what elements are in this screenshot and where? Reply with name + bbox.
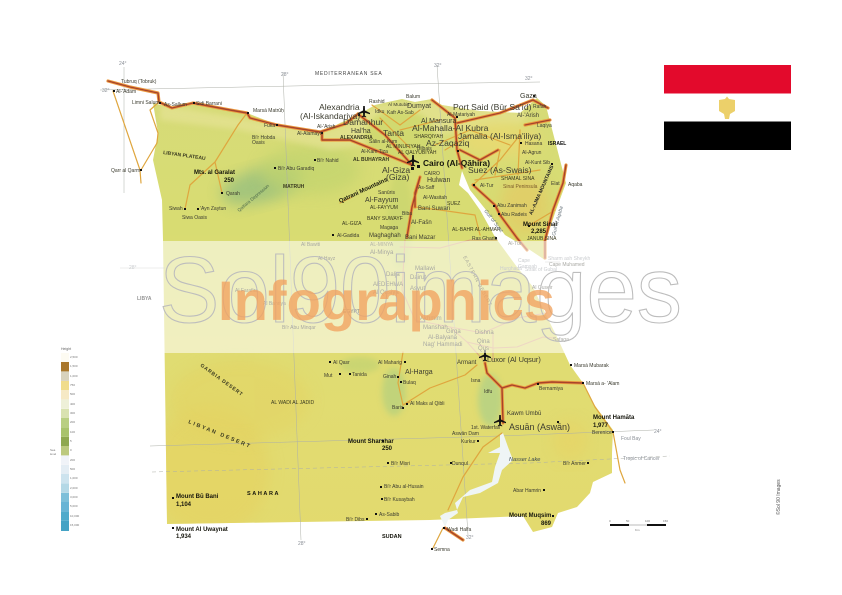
labels: Nile valley and eastern coast: Qus bbox=[478, 346, 489, 352]
labels: Nile valley and eastern coast: Dishna bbox=[475, 330, 494, 336]
labels: Nile delta: AL QALYUBIYAH bbox=[398, 150, 437, 156]
legend: height colour scale: 750 bbox=[70, 383, 75, 387]
labels: Sinai: Cape bbox=[518, 258, 530, 264]
flag emblem: eagle bbox=[719, 96, 735, 119]
labels: Sinai: 2,285 bbox=[531, 229, 547, 235]
labels: sea and countries: LIBYA bbox=[137, 296, 152, 302]
labels: Nile delta: Az-Zaqaziq bbox=[426, 138, 470, 148]
labels: Sinai: Sharm ash Sheykh bbox=[548, 256, 590, 262]
labels: Aswan and Lake Nasser: Mount Muqsim bbox=[509, 513, 551, 519]
labels: western desert and south: Bi'r Misri bbox=[391, 461, 410, 467]
labels: Cairo to Minya: Al-Gadida bbox=[337, 233, 359, 239]
labels: north-west: (Al-Iskandariya) bbox=[300, 111, 360, 121]
labels: north-west: Siwah bbox=[169, 206, 183, 212]
labels: Sinai: SHAMAL SINA bbox=[501, 176, 535, 182]
labels: Nile delta: Dumyat bbox=[407, 103, 431, 110]
labels: sea and countries: MEDITERRANEAN SEA bbox=[315, 71, 382, 77]
legend: height colour scale: 2,500 bbox=[70, 355, 78, 359]
legend: height colour scale: level bbox=[50, 452, 57, 456]
labels: Sinai: Gamsah bbox=[518, 264, 537, 270]
scale bar bbox=[609, 519, 668, 532]
labels: Cairo to Minya: BANY SUWAYF bbox=[367, 216, 403, 222]
labels: north-west: Limni Salum bbox=[132, 100, 160, 106]
legend: height colour scale: 200 bbox=[70, 458, 75, 462]
labels: north-west: 'Ayn Zaytun bbox=[200, 206, 226, 212]
labels: Nile valley and eastern coast: Akhmim bbox=[420, 316, 442, 322]
legend: height colour scale: Height bbox=[61, 347, 71, 351]
labels: Cairo to Minya: AL-BAHR AL-AHMAR bbox=[452, 227, 501, 233]
labels: Cairo to Minya: Qatrani Mountains bbox=[338, 177, 389, 205]
labels: Nile delta: Cairo (Al-Qāhira) bbox=[423, 158, 490, 168]
labels: north-west: Al-Alamayn bbox=[297, 131, 323, 137]
labels: Aswan and Lake Nasser: Nasser Lake bbox=[509, 457, 540, 463]
labels: western desert and south: Al-Harga bbox=[405, 369, 433, 376]
labels: Nile valley and eastern coast: AL-MINYA bbox=[370, 242, 394, 248]
labels: western desert and south: Bi'r Kusaybah bbox=[384, 497, 415, 503]
labels: Sinai bbox=[480, 93, 590, 273]
labels: north-west: Bi'r Hobda bbox=[252, 135, 275, 141]
labels: Sinai: Gulf of Aqaba bbox=[551, 205, 565, 237]
labels: Cairo to Minya: Al-Fayyum bbox=[365, 197, 399, 204]
labels: north-west: Bi'r Nahid bbox=[317, 158, 339, 164]
labels: north-west: Sidi Barrani bbox=[196, 101, 222, 107]
labels: western desert and south: Tanida bbox=[352, 372, 367, 378]
labels: western desert and south: 1,934 bbox=[176, 534, 192, 540]
labels: Nile delta: Al-Mahalla-Al Kubra bbox=[412, 123, 489, 133]
labels: north-west: Tubruq (Tobruk) bbox=[121, 79, 157, 85]
labels: Nile valley and eastern coast: Al Qusiya bbox=[373, 290, 399, 296]
labels: Nile valley and eastern coast: Girga bbox=[446, 329, 461, 335]
legend: height colour scale: 300 bbox=[70, 411, 75, 415]
labels: western desert and south: As-Sabib bbox=[379, 512, 400, 518]
labels: Nile delta bbox=[340, 94, 541, 168]
labels: north-west: Qarr al Qarm bbox=[111, 168, 140, 174]
labels: Aswan and Lake Nasser: Aswān Dam bbox=[452, 431, 479, 437]
labels: Nile delta: AL MINUFIYAH bbox=[386, 144, 421, 150]
labels: Nile valley and eastern coast: Dalja bbox=[386, 272, 400, 278]
labels: north-west: Al-'Adam bbox=[116, 89, 136, 95]
labels: north-west: Al-'Arish bbox=[317, 124, 336, 130]
legend: height colour scale: 500 bbox=[70, 467, 75, 471]
legend: height colour scale: 5 bbox=[70, 439, 72, 443]
labels: Aswan and Lake Nasser: Semna bbox=[434, 547, 450, 553]
labels: Nile delta: Sālin al-Kum bbox=[369, 139, 397, 145]
labels: western desert and south: Ginah bbox=[383, 374, 397, 380]
labels: north-west: Bi'r Abu Garadiq bbox=[278, 166, 314, 172]
labels: Nile delta: Al-Kam Tiza bbox=[361, 149, 388, 155]
airport icons bbox=[358, 106, 506, 426]
labels: Sinai: Al-Tur bbox=[480, 183, 494, 189]
labels: Aswan and Lake Nasser bbox=[434, 411, 660, 553]
labels: Nile valley and eastern coast: Marsá Mubarak bbox=[574, 363, 609, 369]
legend: height colour scale bbox=[50, 347, 80, 531]
labels: Sinai: Abu Radeis bbox=[501, 212, 527, 218]
labels: Nile valley and eastern coast: EASTERN DESERT bbox=[461, 255, 493, 308]
legend: height colour scale: 100 bbox=[70, 430, 75, 434]
scale bar: Km bbox=[635, 528, 640, 532]
labels: Cairo to Minya: Sanūris bbox=[378, 190, 395, 196]
labels: Nile valley and eastern coast: Al Bawiti bbox=[301, 242, 320, 248]
labels: Sinai: Sinai Peninsula bbox=[503, 184, 538, 190]
labels: Nile delta: Rashid bbox=[369, 99, 385, 105]
labels: Aswan and Lake Nasser: Foul Bay bbox=[621, 436, 641, 442]
labels: Aswan and Lake Nasser: 1,977 bbox=[593, 423, 609, 429]
legend: height colour scale: 2,000 bbox=[70, 486, 78, 490]
labels: Cairo to Minya: Biba bbox=[402, 211, 412, 217]
labels: Sinai: Aqaba bbox=[568, 182, 583, 188]
legend: height colour scale: 15,000 bbox=[70, 523, 80, 527]
labels: Nile valley and eastern coast: Idfu bbox=[484, 389, 493, 395]
labels: western desert and south: Bi'r Dibs bbox=[346, 517, 365, 523]
latitude and longitude labels: 28° bbox=[129, 265, 137, 271]
labels: Aswan and Lake Nasser: Abar Hamrin bbox=[513, 488, 541, 494]
legend: height colour scale: 1,000 bbox=[70, 476, 78, 480]
labels: Sinai: Al-Tur bbox=[508, 241, 522, 247]
labels: Cairo to Minya: Suez (As-Swais) bbox=[468, 165, 532, 175]
labels: Nile valley and eastern coast: Al Farafira bbox=[235, 288, 258, 294]
labels: western desert and south: Mount Sharshar bbox=[348, 439, 394, 445]
panel: land relief of Egypt bbox=[153, 98, 613, 532]
labels: Nile delta: Port Said (Būr Sa'īd) bbox=[453, 102, 532, 112]
latitude and longitude labels: 24° bbox=[119, 61, 127, 67]
labels: western desert and south: Bi'r Abu al-Husain bbox=[384, 484, 424, 490]
labels: Cairo to Minya: Bani Suwari bbox=[418, 206, 450, 212]
labels: Aswan and Lake Nasser: Tropic of Cancer bbox=[623, 456, 660, 462]
labels: Sinai: Hurghada bbox=[500, 266, 522, 272]
latitude and longitude labels: 32° bbox=[434, 63, 442, 69]
labels: Aswan and Lake Nasser: Kawm Umbū bbox=[507, 411, 541, 417]
labels: western desert and south: Al Qasr bbox=[333, 360, 350, 366]
legend: height colour scale: 0 bbox=[70, 448, 72, 452]
labels: western desert and south: Bulaq bbox=[403, 380, 416, 386]
major red roads bbox=[108, 81, 582, 540]
labels: Nile valley and eastern coast: Dairut bbox=[410, 275, 426, 281]
labels: western desert and south: Mount Bū Bani bbox=[176, 494, 219, 500]
pale band behind the watermark bbox=[0, 241, 842, 353]
labels: Cairo to Minya: CAIRO bbox=[424, 171, 440, 177]
labels: Nile delta: Idku bbox=[375, 109, 385, 115]
scale bar: 50 bbox=[626, 519, 630, 523]
labels: north-west: Marsá Matrūḥ bbox=[253, 108, 284, 114]
labels: Cairo to Minya: Al-Fašn bbox=[411, 220, 432, 226]
labels: western desert and south: SAHARA bbox=[247, 491, 280, 497]
labels: sea and countries: EGYPT bbox=[343, 309, 360, 315]
pale roads under the watermark bbox=[400, 240, 553, 362]
labels: Cairo to Minya: Bani Mazar bbox=[405, 235, 435, 241]
latitude and longitude labels bbox=[102, 61, 662, 547]
labels: Nile valley and eastern coast: Luxor (Al Uqsur) bbox=[487, 355, 541, 364]
labels: north-west: Mts. al Garalat bbox=[194, 170, 235, 176]
labels: Nile valley and eastern coast: AEDEHWA bbox=[373, 282, 403, 288]
labels: western desert and south: LIBYAN DESERT bbox=[187, 419, 252, 450]
labels: Nile delta: Al Mansura bbox=[421, 118, 457, 125]
labels: Aswan and Lake Nasser: Mount Hamāta bbox=[593, 415, 635, 421]
scale bar: 0 bbox=[609, 519, 611, 523]
minor orange roads bbox=[113, 91, 625, 548]
map of Egypt infographic bbox=[50, 61, 791, 551]
labels: north-west: Siwa Oasis bbox=[182, 215, 208, 221]
labels: western desert and south: Mount Al Uwaynat bbox=[176, 527, 228, 533]
latitude and longitude labels: 28° bbox=[281, 72, 289, 78]
labels: Cairo to Minya: Hulwan bbox=[427, 177, 450, 184]
labels: Nile delta: Jamalia (Al-Isma'iliya) bbox=[458, 131, 541, 141]
labels: north-west: As-Sallum bbox=[164, 102, 187, 108]
labels: western desert and south: 1,104 bbox=[176, 502, 192, 508]
labels: sea and countries bbox=[137, 71, 566, 540]
labels: Sinai: Abu Zanimah bbox=[497, 203, 527, 209]
labels: Cairo to Minya: Al-Wasitah bbox=[423, 195, 447, 201]
scale bar: 150 bbox=[663, 519, 668, 523]
labels: Nile delta: Bilbais bbox=[417, 146, 432, 152]
labels: Nile valley and eastern coast: Al Bahriya bbox=[263, 301, 286, 307]
labels: Nile valley and eastern coast: Safaga bbox=[553, 337, 569, 343]
labels: Aswan and Lake Nasser: Kurkur bbox=[461, 439, 476, 445]
labels: Sinai: Gulf of Suez bbox=[482, 209, 504, 234]
labels: Nile valley and eastern coast: Al Quseir bbox=[532, 285, 553, 291]
latitude and longitude labels: 32° bbox=[466, 535, 474, 541]
labels: north-west: Qattara Depression bbox=[236, 183, 270, 213]
legend: height colour scale: Sea bbox=[50, 448, 56, 452]
labels: north-west bbox=[111, 79, 360, 221]
labels: Aswan and Lake Nasser: Bi'r Anmer bbox=[563, 461, 586, 467]
labels: Nile delta: Damanhur bbox=[343, 117, 383, 127]
labels: Nile valley and eastern coast: Bernamiya bbox=[539, 386, 563, 392]
labels: Cairo to Minya: Maghaghah bbox=[369, 233, 401, 239]
labels: Nile valley and eastern coast: Al-Balyana bbox=[428, 335, 458, 341]
labels: Sinai: Cape Muhamed bbox=[549, 262, 585, 268]
legend: height colour scale: 1,500 bbox=[70, 364, 78, 368]
labels: Sinai: Al-Kunt Sib bbox=[525, 160, 550, 166]
labels: western desert and south bbox=[176, 360, 444, 540]
labels: Nile delta: ALEXANDRIA bbox=[340, 135, 373, 141]
labels: Sinai: Gaza bbox=[520, 93, 537, 100]
labels: Nile delta: Al Mutubis bbox=[388, 102, 410, 107]
labels: Sinai: Hasana bbox=[525, 141, 542, 147]
labels: Cairo to Minya: AL-GIZA bbox=[342, 221, 362, 227]
legend: height colour scale: 200 bbox=[70, 420, 75, 424]
labels: Nile valley and eastern coast: Asyut bbox=[410, 286, 425, 292]
labels: north-west: Alexandria bbox=[319, 102, 360, 112]
legend: height colour scale: 400 bbox=[70, 402, 75, 406]
labels: Sinai: Strait of Gubal bbox=[525, 267, 557, 273]
labels: Aswan and Lake Nasser: Asuān (Aswān) bbox=[509, 422, 570, 432]
watermark: Infographics: Infographics bbox=[218, 269, 555, 332]
labels: Aswan and Lake Nasser: 869 bbox=[541, 521, 552, 527]
labels: north-west: LIBYAN PLATEAU bbox=[163, 150, 206, 162]
roads bbox=[108, 81, 625, 548]
legend: height colour scale: 5,000 bbox=[70, 504, 78, 508]
relief colour patches bbox=[150, 100, 588, 535]
legend: height colour scale: 3,000 bbox=[70, 495, 78, 499]
labels: Nile valley and eastern coast: Armant bbox=[457, 360, 477, 366]
labels: Nile valley and eastern coast: Manshah bbox=[423, 325, 448, 331]
labels: Nile valley and eastern coast: Isna bbox=[471, 378, 481, 384]
labels: Sinai: AL-AJMA MOUNTAINS bbox=[528, 164, 556, 216]
labels: Sinai: Laqiya bbox=[537, 123, 552, 129]
labels: Cairo to Minya bbox=[337, 165, 532, 242]
labels: western desert and south: Baris bbox=[392, 405, 404, 411]
labels: Aswan and Lake Nasser: Dunqul bbox=[452, 461, 468, 467]
latitude and longitude labels: 28° bbox=[298, 541, 306, 547]
labels: Nile delta: Tanta bbox=[383, 128, 404, 138]
labels: Sinai: Mount Sinai bbox=[523, 222, 557, 228]
labels: Sinai: Al-'Arish bbox=[517, 113, 539, 119]
legend: height colour scale: 1,000 bbox=[70, 374, 78, 378]
labels: Nile valley and eastern coast: Marsá a- 'Alam bbox=[586, 381, 619, 387]
labels: western desert and south: Mut bbox=[324, 373, 333, 379]
labels: north-west: Fuka bbox=[264, 123, 275, 129]
legend: height colour scale: 10,000 bbox=[70, 514, 80, 518]
labels: Cairo to Minya: Al-Giza bbox=[382, 165, 410, 175]
labels: Nile valley and eastern coast: Nag' Hammadi bbox=[423, 342, 462, 348]
labels: Nile delta: Balum bbox=[406, 94, 420, 100]
latitude and longitude labels: 24° bbox=[654, 429, 662, 435]
labels: Nile delta: AL BUHAYRAH bbox=[353, 157, 390, 163]
labels: Cairo to Minya: (Giza) bbox=[386, 172, 410, 182]
labels: Sinai: Rafah bbox=[533, 104, 547, 110]
labels: Cairo to Minya: AL-FAYYUM bbox=[370, 205, 398, 211]
labels: Cairo to Minya: Ras Gharib bbox=[472, 236, 498, 242]
labels: sea and countries: ISRAEL bbox=[548, 141, 566, 147]
watermark: Sol90images: Sol90images bbox=[159, 237, 682, 342]
labels: Nile delta: Kafr As-Sab bbox=[387, 110, 414, 116]
labels: Aswan and Lake Nasser: Wadi Halfa bbox=[447, 527, 471, 533]
labels: Nile valley and eastern coast: Qina bbox=[477, 339, 490, 345]
credit: ©Sol 90 Images bbox=[775, 479, 782, 515]
labels: western desert and south: AL WADI AL JADID bbox=[271, 400, 314, 406]
scale bar: 100 bbox=[645, 519, 650, 523]
labels: Nile valley and eastern coast: Mallawi bbox=[415, 266, 435, 272]
labels: Nile valley and eastern coast: Bi'r Abu Minqar bbox=[282, 325, 316, 331]
labels: north-west: MATRUH bbox=[283, 184, 305, 190]
labels: western desert and south: 250 bbox=[382, 446, 393, 452]
labels: Nile delta: Al-Matariyah bbox=[447, 112, 475, 118]
graticule lines bbox=[100, 65, 670, 540]
Lake Nasser bbox=[440, 433, 513, 527]
labels: Sinai: Elat bbox=[551, 181, 560, 187]
labels: Aswan and Lake Nasser: Berenice bbox=[592, 430, 612, 436]
city markers bbox=[113, 90, 614, 550]
flag of Egypt bbox=[664, 65, 791, 150]
labels: Sinai: Al-Agrun bbox=[522, 150, 542, 156]
labels: sea and countries: SUDAN bbox=[382, 534, 402, 540]
labels: Nile valley and eastern coast: Al-Minya bbox=[370, 250, 394, 256]
labels: Cairo to Minya: As-Saff bbox=[418, 185, 435, 191]
latitude and longitude labels: 32° bbox=[525, 76, 533, 82]
labels: Sinai: JANUB SINA bbox=[527, 236, 557, 242]
labels: Nile valley and eastern coast bbox=[235, 242, 619, 395]
labels: north-west: 250 bbox=[224, 178, 235, 184]
labels: Nile delta: Hal'ha bbox=[351, 128, 371, 135]
labels: western desert and south: GARBIA DESERT bbox=[199, 363, 244, 398]
legend: height colour scale: 500 bbox=[70, 392, 75, 396]
labels: north-west: Oasis bbox=[252, 140, 265, 146]
labels: Cairo to Minya: Magaga bbox=[380, 225, 398, 231]
labels: Cairo to Minya: SUEZ bbox=[447, 201, 460, 207]
labels: western desert and south: Al Maks al Qibli bbox=[410, 401, 444, 407]
latitude and longitude labels: 32° bbox=[102, 88, 110, 94]
labels: Nile delta: SHARQIYAH bbox=[414, 134, 443, 140]
labels: Aswan and Lake Nasser: 1st. Waterfall bbox=[471, 425, 500, 431]
labels: western desert and south: Al Maharig bbox=[378, 360, 402, 366]
labels: Nile valley and eastern coast: Al Hayz bbox=[318, 256, 336, 262]
labels: north-west: Qarah bbox=[226, 191, 240, 197]
